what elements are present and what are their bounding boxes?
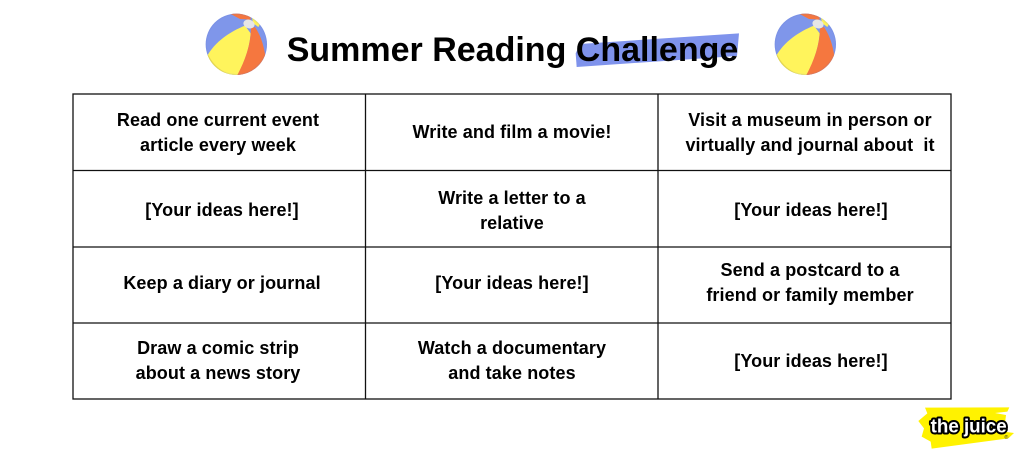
cell: museum [685, 110, 935, 155]
cell: comic strip: Draw a comic strip [137, 338, 299, 358]
cell: current event [117, 110, 319, 155]
challenge grid table [72, 93, 952, 400]
cell: your ideas 2: [Your ideas here!] [734, 200, 888, 220]
cell: diary: Keep a diary or journal [123, 272, 321, 292]
cell: postcard: friend or family member [706, 285, 914, 305]
cell: documentary: Watch a documentary [418, 338, 606, 358]
cell: letter: relative [480, 213, 544, 233]
icon: title highlight stroke [576, 33, 739, 67]
cell: postcard: Send a postcard to a [720, 260, 900, 280]
cell: movie: Write and film a movie! [412, 122, 612, 142]
logo: the juice: ® [1004, 434, 1008, 441]
icon: left beach ball [206, 14, 267, 75]
cell: letter: Write a letter to a [438, 188, 586, 208]
cell: museum: Visit a museum in person or [688, 110, 932, 130]
cell: comic strip [136, 338, 300, 383]
cell: documentary [418, 338, 606, 383]
cell: your ideas 3: [Your ideas here!] [435, 272, 589, 292]
cell: your ideas 4: [Your ideas here!] [734, 350, 888, 370]
cell: current event: Read one current event [117, 110, 319, 130]
cell: letter [438, 188, 586, 233]
cell: current event: article every week [140, 135, 296, 155]
cell: museum: virtually and journal about it [685, 135, 935, 155]
title: Summer Reading Challenge [287, 31, 738, 69]
logo: the juice: the juice [931, 416, 1007, 437]
cell: documentary: and take notes [448, 363, 576, 383]
cell: comic strip: about a news story [136, 363, 300, 383]
logo: the juice [918, 407, 1014, 449]
cell: your ideas 1: [Your ideas here!] [145, 200, 299, 220]
cell: postcard [706, 260, 914, 305]
icon: right beach ball [774, 14, 836, 75]
